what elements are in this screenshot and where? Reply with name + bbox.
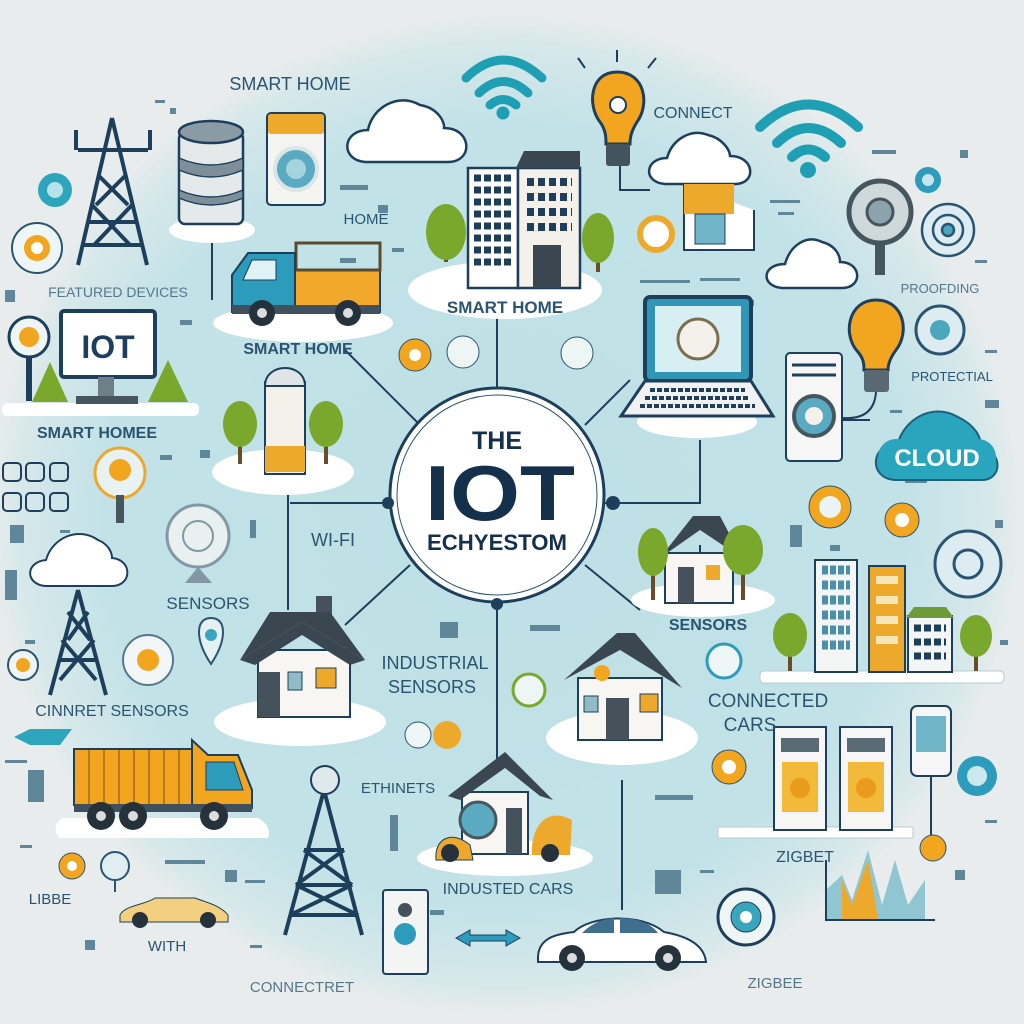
icon: cloud badge: CLOUD xyxy=(894,445,980,472)
icon: tower bottom xyxy=(285,766,362,935)
icon: bulb right xyxy=(843,300,903,418)
panel: large house xyxy=(214,596,386,746)
label: connected cars xyxy=(708,691,828,736)
label: industrial sensors xyxy=(381,653,489,697)
label: industrial sensors: INDUSTRIAL xyxy=(381,653,489,673)
icon: kiosk device xyxy=(640,184,754,250)
icon: signal device bottom xyxy=(383,890,428,974)
icon: coin left xyxy=(12,223,62,273)
icon: double arrow xyxy=(456,930,520,946)
panel: house centre right xyxy=(546,633,698,765)
label: faint caption right: PROOFDING xyxy=(901,281,979,296)
hub title: iot: IOT xyxy=(425,449,575,537)
panel: house with car xyxy=(417,752,593,876)
icon: cloud right top xyxy=(649,133,750,184)
icon: cloud badge xyxy=(876,411,998,480)
center hub xyxy=(382,388,620,610)
panel: laptop xyxy=(621,297,773,438)
panel: IoT monitor xyxy=(2,311,199,416)
label: home: HOME xyxy=(344,211,388,228)
panel: house right xyxy=(631,516,775,617)
label: with: WITH xyxy=(148,938,186,955)
icon: database barrels xyxy=(169,121,255,243)
panel: silo with trees xyxy=(212,368,354,495)
label: sensors right: SENSORS xyxy=(669,617,747,634)
label: zigbet: ZIGBET xyxy=(776,849,834,866)
icon: wifi right xyxy=(760,104,858,176)
icon: light bulb top xyxy=(578,50,656,166)
chart: mini bars xyxy=(826,850,935,920)
icon: small yellow car xyxy=(120,898,228,928)
label: sensors left: SENSORS xyxy=(166,594,250,613)
icon: washer device top xyxy=(267,113,325,205)
panel: twin devices xyxy=(718,727,913,838)
panel: bottom truck xyxy=(55,740,269,838)
icon: coin far left xyxy=(8,650,38,680)
icon: coin bottom left xyxy=(59,853,85,879)
icon: pin bottom left xyxy=(101,852,129,892)
label: smart home truck: SMART HOME xyxy=(243,341,353,358)
label: cinnret sensors: CINNRET SENSORS xyxy=(35,703,189,720)
icon: cloud top xyxy=(347,100,466,162)
label: faint caption left: FEATURED DEVICES xyxy=(48,284,188,300)
label: libbe: LIBBE xyxy=(29,891,71,908)
label: wi-fi: WI-FI xyxy=(311,530,355,550)
icon: mid coins cluster xyxy=(399,306,1001,749)
icon: phone xyxy=(911,706,951,835)
label: zigbee: ZIGBEE xyxy=(747,975,803,992)
icon: round sensor right xyxy=(849,181,911,275)
panel: smart building xyxy=(408,151,614,319)
icon: sensor dial left xyxy=(95,448,145,523)
connector lines xyxy=(212,165,870,910)
label: smart home top: SMART HOME xyxy=(229,74,351,94)
label: industed cars: INDUSTED CARS xyxy=(443,881,573,898)
label: smart homes: SMART HOMEE xyxy=(37,425,157,442)
panel: IoT monitor: IOT xyxy=(81,329,135,365)
icon: teal badge xyxy=(957,756,997,796)
panel: tower with cloud xyxy=(30,534,127,695)
icon: tower upper left xyxy=(76,118,150,265)
icon: coin far right xyxy=(920,835,946,861)
label: connected cars: CARS xyxy=(724,715,776,736)
label: connected cars: CONNECTED xyxy=(708,691,828,712)
icon: teal arrow pill xyxy=(14,729,72,745)
panel: buildings row xyxy=(760,560,1004,683)
icon: seal right xyxy=(922,204,974,256)
icon: cloud right middle xyxy=(767,239,857,288)
icon: coin lower right xyxy=(712,750,746,784)
icon: teal dot left xyxy=(38,173,72,207)
label: connectret: CONNECTRET xyxy=(250,979,354,996)
label: smart home building: SMART HOME xyxy=(447,298,563,317)
label: industrial sensors: SENSORS xyxy=(388,677,476,697)
icon: white car xyxy=(538,918,706,971)
icon: satellite dish xyxy=(167,505,229,583)
icon: locator left xyxy=(123,635,173,685)
label: connect: CONNECT xyxy=(653,105,733,122)
icon: pin xyxy=(199,618,223,664)
hub title: ecosystem: ECHYESTOM xyxy=(427,530,567,555)
icon: wifi top xyxy=(466,60,542,118)
label: protectial: PROTECTIAL xyxy=(911,369,993,384)
hub title: the: THE xyxy=(472,427,522,455)
label: ethinets: ETHINETS xyxy=(361,780,435,797)
icon: target sensor bottom xyxy=(718,889,774,945)
icon: appliance right xyxy=(786,353,842,461)
icon: small truck xyxy=(213,243,393,342)
icon: teal dot right xyxy=(915,167,941,193)
icon: app grid left xyxy=(3,463,68,511)
